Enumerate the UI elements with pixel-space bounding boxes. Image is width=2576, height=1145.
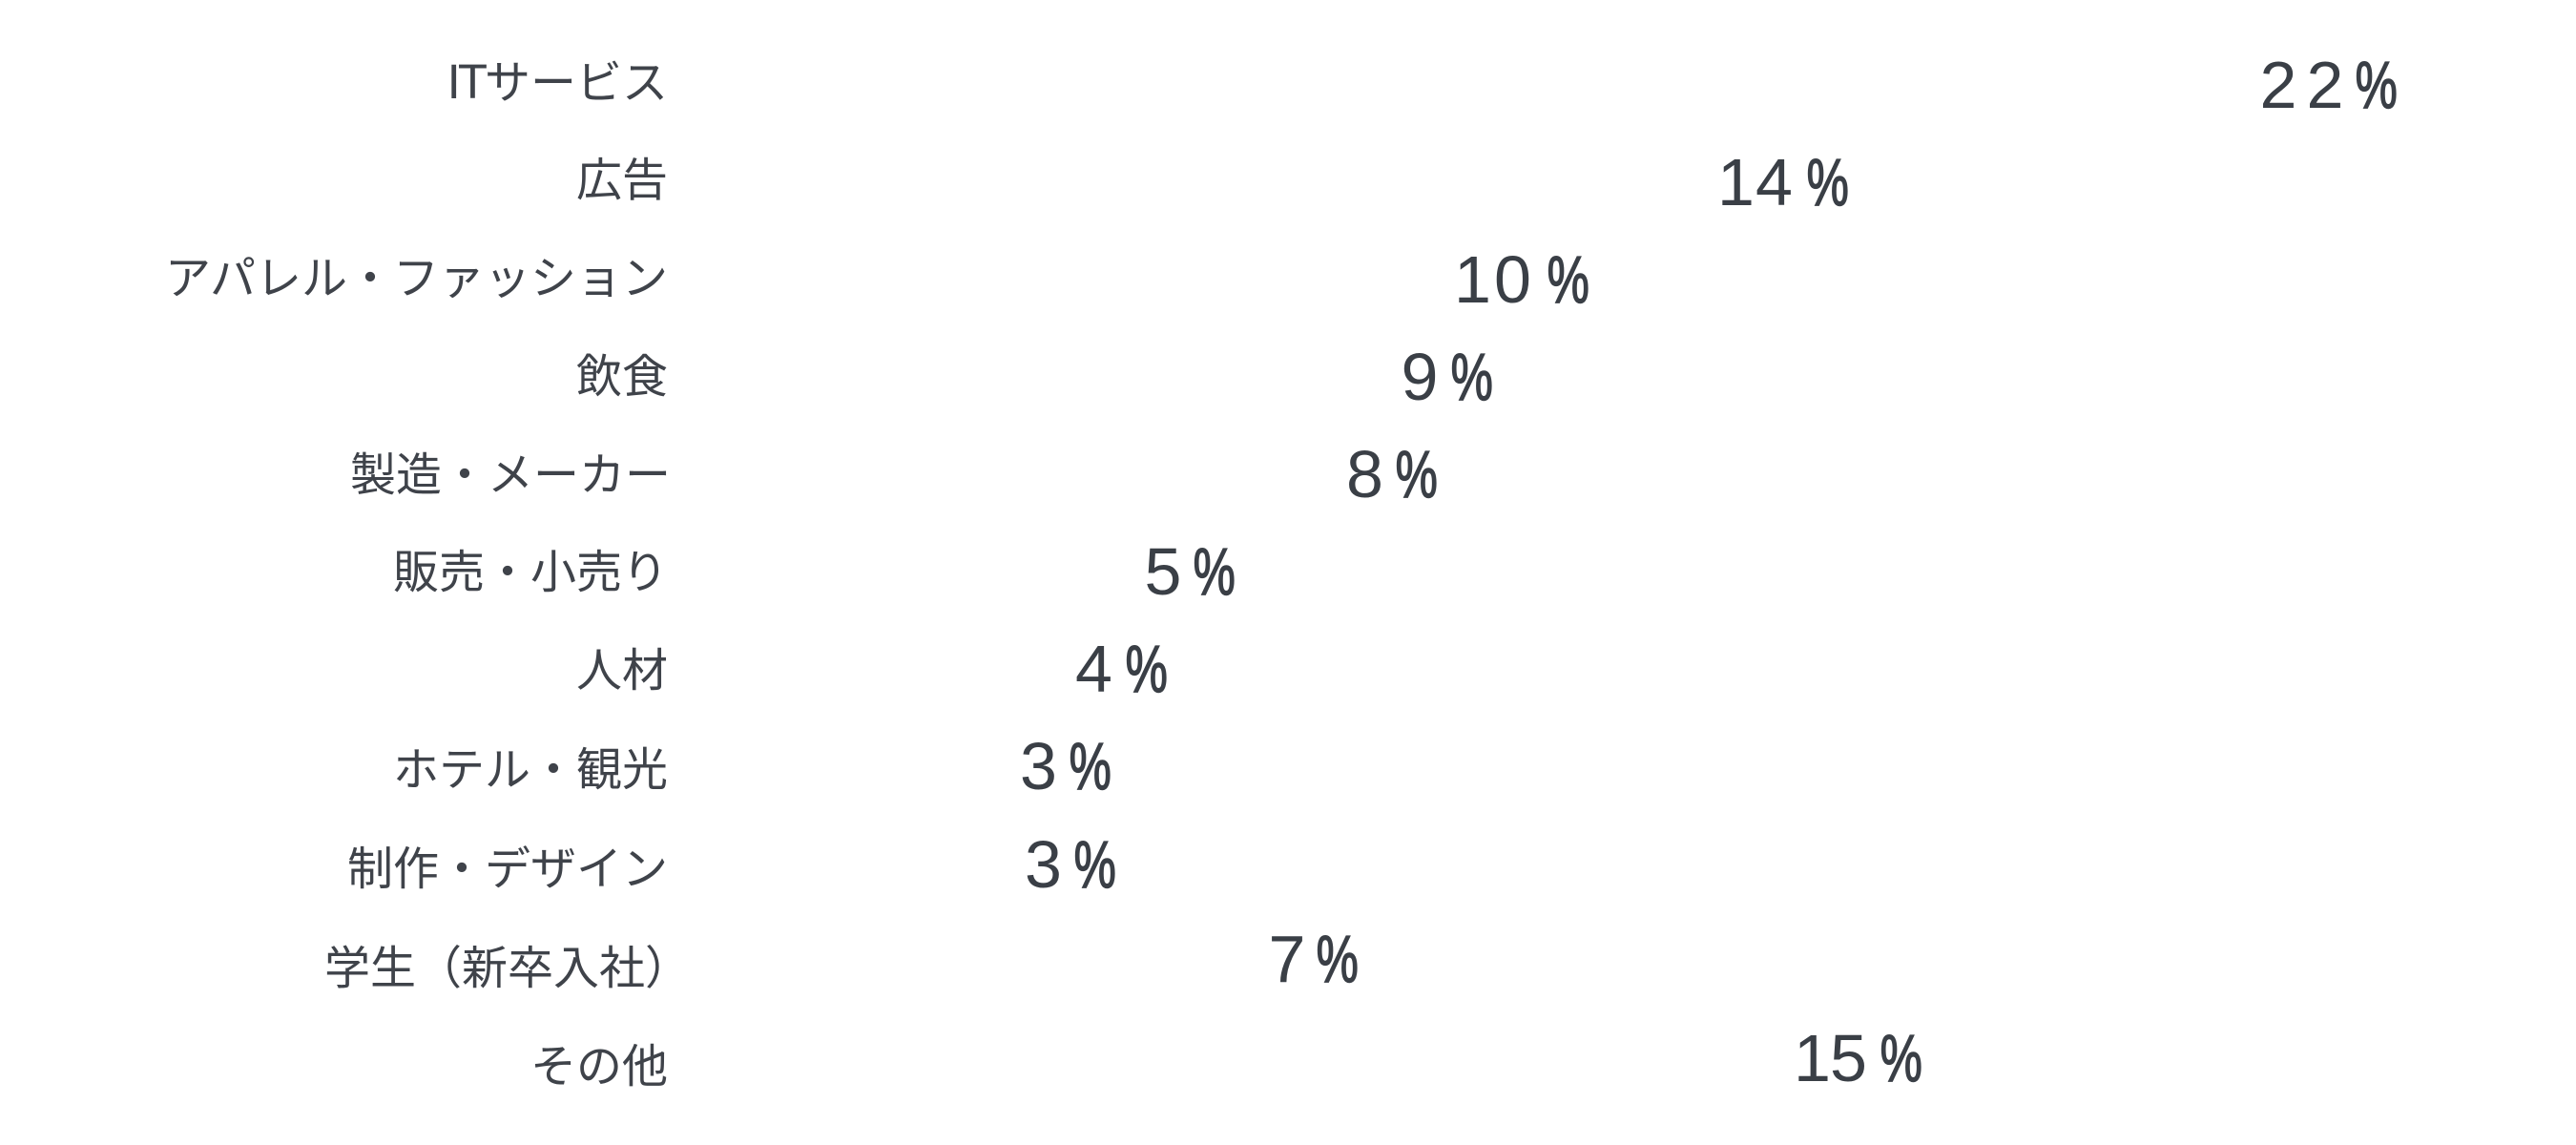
- row: hotels and tourism: %: [1070, 729, 1111, 803]
- row: food and drink: 飲食: [576, 352, 668, 403]
- row: manufacturing: 8: [1346, 437, 1383, 511]
- row: other: その他: [530, 1042, 668, 1093]
- row: sales and retail: 5: [1145, 534, 1181, 609]
- row: food and drink: [576, 340, 1493, 414]
- row: other: %: [1880, 1021, 1922, 1095]
- row: other: 15: [1794, 1021, 1867, 1095]
- row: advertising: 14: [1717, 145, 1793, 219]
- row: manufacturing: 製造・メーカー: [350, 450, 671, 501]
- row: food and drink: %: [1451, 340, 1493, 414]
- row: production and design: %: [1074, 827, 1116, 902]
- row: manufacturing: %: [1396, 437, 1438, 511]
- row: staffing: 4: [1075, 632, 1112, 706]
- row: apparel and fashion: 10: [1454, 242, 1531, 317]
- row: hotels and tourism: ホテル・観光: [393, 745, 668, 796]
- row: apparel and fashion: %: [1548, 242, 1589, 317]
- row: IT services: [447, 48, 2398, 122]
- row: students, new graduates: 学生（新卒入社）: [324, 944, 691, 994]
- row: production and design: [347, 827, 1116, 902]
- row: advertising: [576, 145, 1849, 219]
- row: manufacturing: [350, 437, 1438, 511]
- row: apparel and fashion: [165, 242, 1589, 317]
- row: hotels and tourism: [393, 729, 1111, 803]
- row: apparel and fashion: アパレル・ファッション: [165, 254, 668, 304]
- row: students, new graduates: 7: [1269, 922, 1305, 996]
- row: IT services: ITサービス: [447, 54, 668, 109]
- row: production and design: 制作・デザイン: [347, 844, 668, 895]
- row: production and design: 3: [1025, 827, 1062, 902]
- row: food and drink: 9: [1401, 340, 1438, 414]
- row: hotels and tourism: 3: [1020, 729, 1057, 803]
- row: IT services: %: [2356, 48, 2398, 122]
- row: staffing: [576, 632, 1168, 706]
- row: staffing: 人材: [576, 646, 668, 697]
- row: sales and retail: [393, 534, 1236, 609]
- row: other: [530, 1021, 1922, 1095]
- row: students, new graduates: %: [1317, 922, 1359, 996]
- row: staffing: %: [1126, 632, 1168, 706]
- row: sales and retail: 販売・小売り: [393, 548, 668, 598]
- row: IT services: 22: [2259, 48, 2343, 122]
- row: advertising: %: [1807, 145, 1849, 219]
- row: students, new graduates: [324, 922, 1359, 996]
- row: sales and retail: %: [1194, 534, 1236, 609]
- row: advertising: 広告: [576, 156, 668, 206]
